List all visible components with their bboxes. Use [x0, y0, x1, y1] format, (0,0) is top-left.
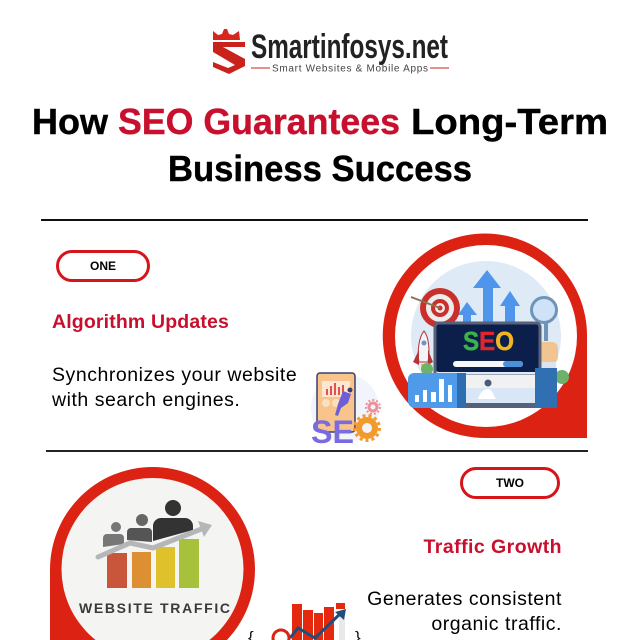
text: algorithm updates description: Synchronizes your website	[52, 364, 297, 386]
title: Long-Term	[411, 101, 608, 142]
title	[32, 101, 608, 189]
logo tagline: Smart Websites & Mobile Apps	[272, 64, 428, 74]
bars	[107, 539, 199, 588]
icon: growth chart	[248, 603, 361, 640]
text: algorithm updates description	[52, 364, 297, 411]
monitor: SEO	[463, 326, 514, 356]
rocket	[413, 331, 433, 373]
title: Business Success	[168, 148, 472, 189]
label: website traffic: WEBSITE TRAFFIC	[79, 600, 230, 616]
icon: SEO phone	[311, 372, 381, 448]
title: SEO Guarantees	[118, 101, 400, 142]
illustration: SEO teardrop	[382, 234, 587, 438]
monitor	[435, 323, 540, 376]
text: traffic growth description	[367, 588, 562, 635]
title: How	[32, 101, 109, 142]
dashboard panels	[408, 368, 557, 408]
growth arrows	[458, 270, 520, 331]
illustration: website traffic teardrop	[50, 467, 255, 640]
people	[103, 500, 193, 547]
badge: one	[56, 250, 150, 282]
heading: algorithm updates: Algorithm Updates	[52, 311, 229, 333]
magnifier and hand	[532, 298, 558, 369]
text: algorithm updates description: with search engines.	[52, 389, 240, 411]
target	[411, 288, 460, 328]
text: traffic growth description: organic traffic.	[431, 613, 562, 635]
bushes	[421, 363, 569, 384]
heading: traffic growth: Traffic Growth	[424, 536, 562, 558]
badge: one: ONE	[90, 259, 116, 273]
badge: two: TWO	[496, 476, 524, 490]
trend arrow	[98, 521, 212, 557]
icon: shield logo	[213, 29, 245, 74]
text: traffic growth description: Generates consistent	[367, 588, 562, 610]
badge: two	[460, 467, 560, 499]
logo	[213, 28, 449, 74]
